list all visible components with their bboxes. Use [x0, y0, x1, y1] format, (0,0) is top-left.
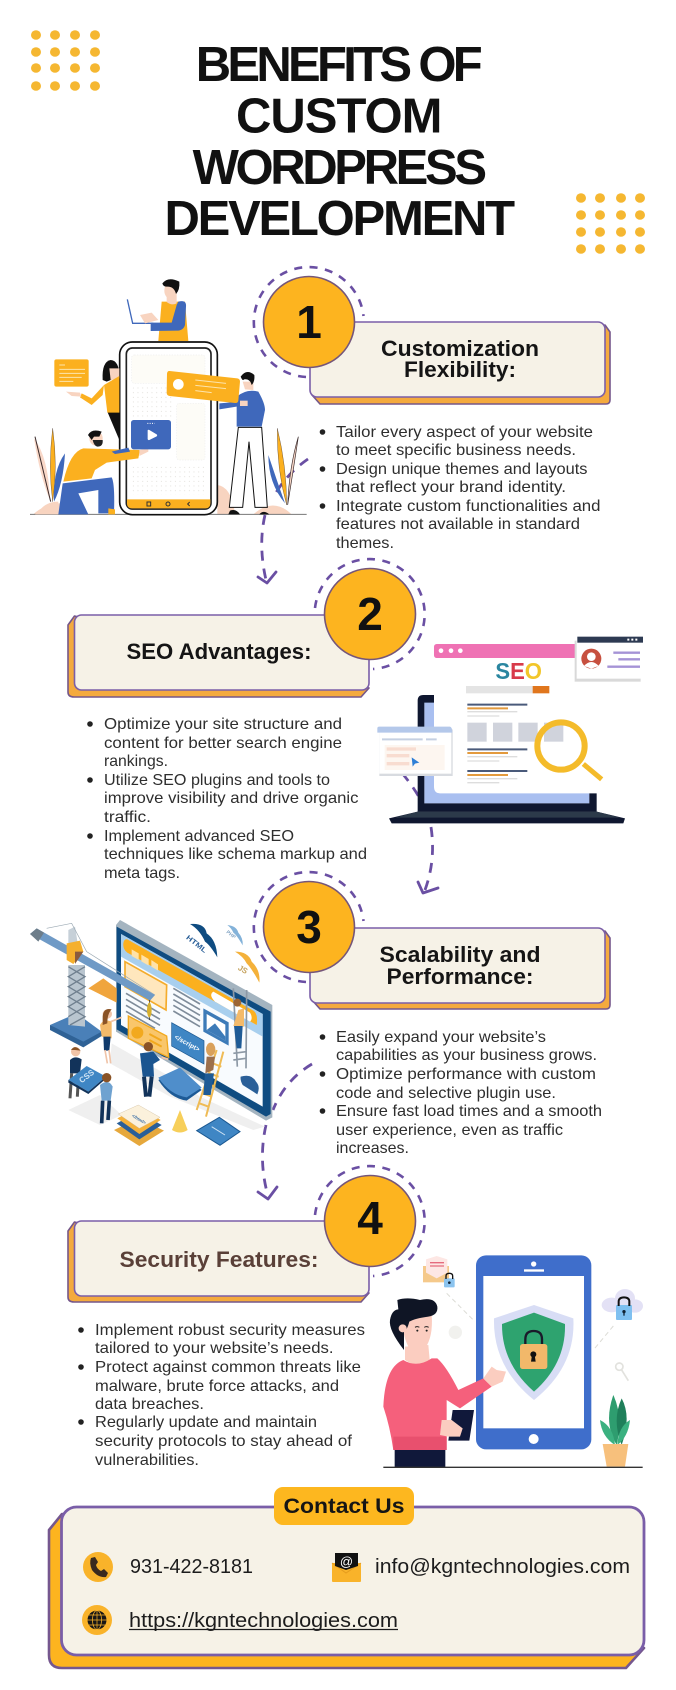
badge: number 1: 1	[296, 296, 322, 348]
laptop	[389, 695, 625, 823]
shield with padlock	[494, 1305, 573, 1400]
text block: step 1 bullets: Design unique themes and layouts	[336, 461, 588, 478]
video card	[131, 420, 171, 449]
decorative dots: right	[576, 193, 645, 254]
kneeling man	[35, 431, 148, 514]
magnifying glass	[537, 722, 602, 779]
text block: step 2 bullets: rankings.	[104, 753, 168, 770]
icon: globe	[82, 1605, 112, 1635]
browser bar	[434, 644, 581, 658]
illustration: team building a mobile app	[30, 279, 307, 515]
text block: step 1 bullets: to meet specific business needs.	[336, 442, 576, 459]
step 2 ring	[315, 559, 425, 669]
text block: step 4 bullets: Regularly update and maintain	[95, 1414, 317, 1431]
code clouds	[184, 924, 260, 983]
illustration: mobile security	[383, 1255, 643, 1467]
badge: number 2	[324, 568, 416, 660]
popup window	[377, 727, 453, 776]
profile card and standing man	[167, 371, 269, 514]
panel: step 2 heading	[68, 615, 369, 697]
icon: email: @	[340, 1554, 353, 1569]
stacked blocks, cone and tile: </html>	[131, 1113, 147, 1125]
text block: step 2 bullets: traffic.	[104, 809, 151, 826]
top man with laptop	[127, 279, 188, 341]
text block: step 2 bullets: content for better search engine	[104, 735, 342, 752]
person	[383, 1298, 506, 1467]
text block: step 3 bullets: Optimize performance with custom	[336, 1066, 596, 1083]
panel: step 3 heading	[310, 928, 610, 1009]
text block: step 2 bullets	[87, 716, 367, 882]
monitor	[116, 920, 272, 1121]
text block: step 3 bullets: capabilities as your business grows.	[336, 1047, 597, 1064]
search result rows	[467, 705, 563, 783]
text block: step 3 bullets: Ensure fast load times and a smooth	[336, 1103, 602, 1120]
icon: email	[332, 1553, 361, 1582]
badge: number 3	[264, 882, 354, 972]
email address: info@kgntechnologies.com	[375, 1556, 630, 1578]
panel: step 1 heading: Customization	[381, 336, 539, 361]
panel: step 1 heading	[310, 322, 610, 404]
text block: step 1 bullets: Integrate custom functionalities and	[336, 498, 600, 515]
phone	[476, 1255, 591, 1449]
badge: number 1	[264, 276, 354, 368]
panel: step 3 heading: Scalability and	[380, 942, 540, 967]
stacked blocks, cone and tile	[114, 1105, 240, 1146]
SEO lettering: SEO	[495, 658, 542, 684]
step 1 ring	[254, 267, 364, 377]
title: CUSTOM	[236, 90, 442, 144]
website link: https://kgntechnologies.com	[129, 1610, 398, 1632]
contact us pill: Contact Us	[284, 1495, 404, 1518]
badge: number 3: 3	[296, 901, 322, 953]
title: WORDPRESS	[193, 141, 487, 195]
title	[164, 38, 515, 246]
text block: step 3 bullets: Easily expand your website’s	[336, 1029, 546, 1046]
text block: step 4 bullets: malware, brute force attacks, and	[95, 1378, 339, 1395]
code clouds: JS	[236, 963, 250, 976]
text block: step 2 bullets: meta tags.	[104, 865, 180, 882]
text block: step 1 bullets	[320, 424, 600, 552]
floor shadows	[68, 1043, 265, 1130]
icon: phone	[83, 1552, 113, 1582]
panel: step 2 heading: SEO Advantages:	[126, 639, 312, 664]
badge: number 4: 4	[357, 1192, 383, 1244]
text block: step 3 bullets: code and selective plugin use.	[336, 1085, 556, 1102]
text block: step 1 bullets: that reflect your brand identity.	[336, 479, 566, 496]
text block: step 4 bullets: vulnerabilities.	[95, 1452, 199, 1469]
illustration: SEO laptop	[377, 637, 643, 823]
text block: step 4 bullets: security protocols to stay ahead of	[95, 1433, 353, 1450]
text block: step 4 bullets	[78, 1322, 365, 1469]
arrow: step 3 to step 4	[258, 1064, 312, 1199]
dashed connectors, key and globe	[447, 1293, 628, 1381]
text block: step 1 bullets: themes.	[336, 535, 394, 552]
illustration: website construction	[30, 920, 272, 1146]
stand and ladders	[158, 988, 247, 1117]
text block: step 2 bullets: techniques like schema markup and	[104, 846, 367, 863]
decorative dots: top left	[31, 30, 100, 91]
plant	[600, 1395, 630, 1467]
text block: step 3 bullets	[320, 1029, 602, 1157]
text block: step 4 bullets: data breaches.	[95, 1396, 204, 1413]
crane	[30, 923, 155, 1047]
step 4 ring	[315, 1166, 425, 1276]
text block: step 2 bullets: Optimize your site structure and	[104, 716, 342, 733]
arrow: step 2 to step 3	[402, 773, 438, 893]
envelope with lock	[423, 1256, 455, 1287]
panel: contact	[49, 1487, 644, 1668]
step 3 ring	[254, 872, 364, 982]
search bar	[466, 686, 549, 693]
arrow: step 1 to step 2	[258, 459, 308, 583]
cloud with lock	[602, 1289, 643, 1320]
text block: step 3 bullets: increases.	[336, 1140, 409, 1157]
builders	[68, 999, 244, 1123]
contact us pill	[274, 1487, 414, 1525]
code clouds: PHP	[225, 930, 237, 941]
text block: step 4 bullets: Implement robust security measures	[95, 1322, 365, 1339]
panel: step 4 heading	[68, 1221, 369, 1302]
panel: step 1 heading: Flexibility:	[404, 357, 516, 382]
title: DEVELOPMENT	[164, 192, 515, 246]
monitor: </script>	[173, 1034, 201, 1054]
text block: step 4 bullets: Protect against common threats like	[95, 1359, 361, 1376]
panel: step 3 heading: Performance:	[386, 964, 534, 989]
phone number: 931-422-8181	[130, 1556, 253, 1578]
panel: step 4 heading: Security Features:	[120, 1247, 318, 1272]
badge: number 4	[324, 1176, 416, 1266]
text block: step 2 bullets: Utilize SEO plugins and tools to	[104, 772, 330, 789]
badge: number 2: 2	[357, 588, 383, 640]
builders: CSS	[77, 1067, 97, 1085]
text block: step 3 bullets: user experience, even as traffic	[336, 1122, 563, 1139]
text block: step 1 bullets: Tailor every aspect of your website	[336, 424, 593, 441]
title: BENEFITS OF	[196, 38, 483, 92]
code clouds: HTML	[184, 934, 208, 955]
profile window	[575, 637, 643, 682]
text block: step 2 bullets: Implement advanced SEO	[104, 828, 294, 845]
text block: step 1 bullets: features not available in standard	[336, 516, 580, 533]
woman with note card	[54, 359, 119, 440]
text block: step 4 bullets: tailored to your website’s needs.	[95, 1340, 334, 1357]
text block: step 2 bullets: improve visibility and drive organic	[104, 790, 358, 807]
